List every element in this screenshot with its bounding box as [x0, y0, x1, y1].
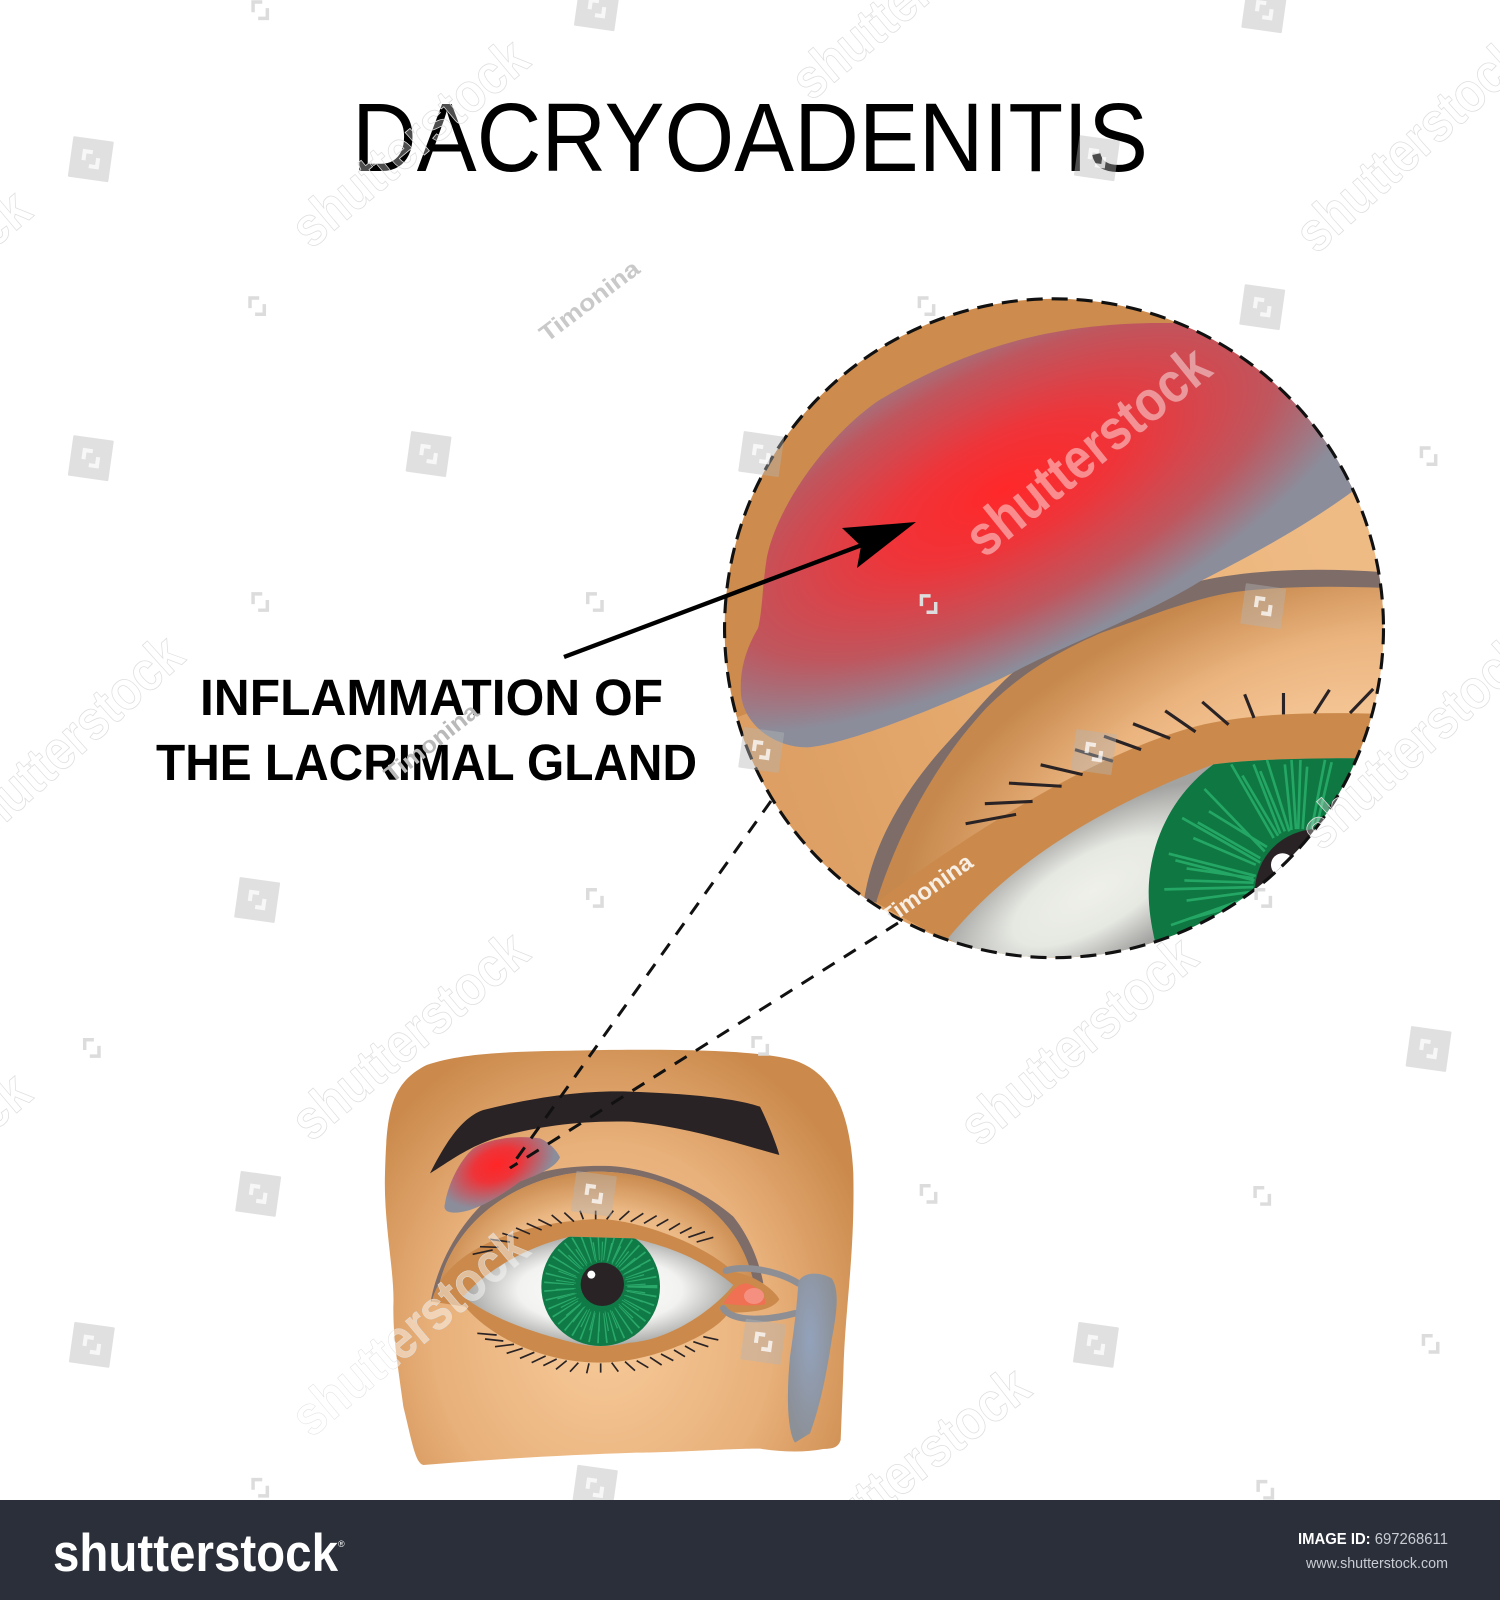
footer logo: shutterstock [53, 1524, 338, 1583]
arrow [564, 522, 916, 657]
pupil highlight [1271, 853, 1290, 872]
white wordmark over gland: shutterstock [953, 333, 1223, 569]
label: inflammation of the lacrimal gland: THE LACRIMAL GLAND [156, 734, 697, 791]
iris [541, 1227, 660, 1346]
sclera [463, 1237, 733, 1346]
lower skin area [737, 492, 1383, 958]
white wordmark over eye: shutterstock [278, 1214, 541, 1448]
pupil [1255, 829, 1315, 888]
eyelid margin [876, 713, 1388, 945]
website: www.shutterstock.com [1305, 1555, 1448, 1572]
sclera [948, 758, 1355, 958]
pupil [581, 1263, 624, 1306]
iris [1148, 758, 1355, 940]
tear duct and caruncle [723, 1268, 798, 1319]
iris rays [559, 1245, 642, 1328]
label: inflammation of the lacrimal gland: INFLAMMATION OF [200, 669, 663, 726]
image id: IMAGE ID: 697268611 [1298, 1531, 1448, 1548]
inner iris rays [566, 1252, 636, 1322]
face / eye region panel [385, 1050, 854, 1465]
eyelid fold [431, 1166, 763, 1302]
eyebrow [430, 1091, 779, 1173]
skin block [385, 1050, 854, 1465]
outline wordmarks: shutterstock [775, 1353, 1042, 1581]
contributor names [379, 254, 978, 931]
upper lashes [473, 1211, 713, 1254]
outline wordmarks: shutterstock [278, 25, 541, 259]
magnified view circle [723, 297, 1386, 960]
footer bar [0, 1500, 1500, 1600]
upper eyelid skin [876, 587, 1388, 968]
iris rays [1164, 760, 1354, 925]
contributor names: Timonina [876, 848, 978, 931]
upper eyelid [437, 1172, 753, 1307]
eyelid ring [432, 1219, 779, 1363]
inflamed lacrimal gland [741, 323, 1370, 747]
magnified anatomy [724, 298, 1384, 958]
title: DACRYOADENITIS [352, 83, 1148, 192]
pupil highlight [587, 1271, 595, 1279]
eyelid fold band [864, 570, 1388, 903]
registered mark: ® [338, 1539, 345, 1549]
contributor names: Timonina [379, 697, 484, 788]
zoom guide dashed lines [510, 801, 898, 1168]
label: inflammation of the lacrimal gland [156, 669, 697, 791]
outline wordmarks: shutterstock [947, 923, 1209, 1157]
lashes [966, 689, 1373, 824]
lower lashes [477, 1333, 718, 1373]
contributor names: Timonina [534, 254, 645, 347]
lacrimal sac [788, 1274, 837, 1443]
inflamed gland [444, 1137, 560, 1213]
outline wordmarks: shutterstock [278, 918, 541, 1152]
dashed circle outline [725, 299, 1383, 958]
